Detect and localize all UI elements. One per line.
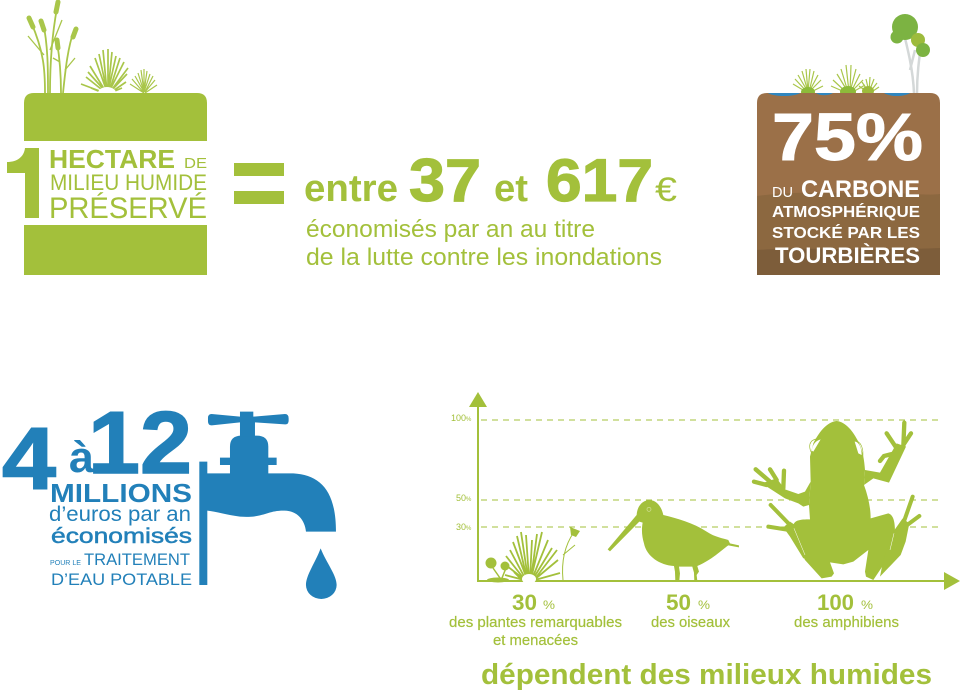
- label: carbon caption: ATMOSPHÉRIQUE: [772, 202, 920, 221]
- stat: 75%: 75%: [772, 100, 923, 175]
- water pools: [768, 93, 910, 96]
- icon: equals sign: [234, 163, 284, 204]
- text: flood savings: 37: [409, 147, 481, 214]
- label: plants 30%: 30: [512, 590, 537, 615]
- label: millions caption: MILLIONS: [50, 478, 192, 508]
- stat: 4 à 12: 4: [2, 409, 56, 508]
- label: plants 30%: [449, 590, 622, 649]
- label: plants 30%: et menacées: [493, 632, 578, 649]
- label: carbon caption: CARBONE: [801, 176, 920, 203]
- icon: tap with drop: [199, 412, 337, 599]
- text: flood savings: [304, 147, 677, 271]
- gridlines and value labels: 50%: [456, 493, 472, 503]
- label: millions caption: POUR LE: [50, 560, 81, 567]
- label: hectare de milieu humide préservé: DE: [184, 155, 207, 172]
- text: flood savings: entre: [304, 168, 398, 210]
- label: birds 50%: [651, 590, 730, 631]
- bottom soil band: [24, 225, 207, 275]
- heading: dépendent des milieux humides: dépendent des milieux humides: [481, 659, 932, 691]
- label: millions caption: économisés: [51, 525, 192, 548]
- label: hectare de milieu humide préservé: PRÉSERVÉ: [49, 192, 207, 225]
- numeral 1: [7, 148, 39, 218]
- label: carbon caption: [772, 176, 920, 268]
- label: birds 50%: %: [698, 598, 710, 612]
- label: millions caption: d’euros par an: [49, 503, 191, 526]
- label: hectare de milieu humide préservé: [49, 144, 207, 225]
- chart: species dependence: [449, 392, 960, 691]
- icon: frog: [754, 421, 919, 580]
- icon: plants: [486, 527, 580, 584]
- icon: birch tree: [890, 14, 930, 93]
- label: amphibians 100%: des amphibiens: [794, 614, 899, 631]
- label: carbon caption: STOCKÉ PAR LES: [772, 223, 920, 242]
- label: carbon caption: DU: [772, 184, 793, 201]
- label: hectare de milieu humide préservé: MILIEU HUMIDE: [50, 170, 207, 195]
- panel: one hectare block: [7, 2, 207, 275]
- text: flood savings: et: [494, 168, 528, 210]
- label: plants 30%: %: [543, 598, 555, 612]
- x axis with arrow: [478, 572, 960, 590]
- label: amphibians 100%: %: [861, 598, 873, 612]
- gridlines and value labels: 30%: [456, 522, 472, 532]
- label: hectare de milieu humide préservé: HECTARE: [49, 144, 175, 174]
- text: flood savings: 617: [546, 147, 653, 214]
- gridlines and value labels: [451, 413, 943, 532]
- icon: peat grasses: [793, 65, 879, 98]
- label: millions caption: [49, 478, 192, 589]
- text: flood savings: de la lutte contre les inondations: [306, 244, 662, 271]
- stat: 4 à 12: 12: [88, 393, 192, 492]
- panel: drinking water savings: [2, 393, 337, 599]
- text: flood savings: économisés par an au titre: [306, 216, 595, 243]
- soil block: [757, 93, 940, 275]
- label: plants 30%: des plantes remarquables: [449, 614, 622, 631]
- top soil band: [24, 93, 207, 141]
- label: carbon caption: TOURBIÈRES: [775, 243, 920, 268]
- stat: 4 à 12: [2, 393, 192, 508]
- stat: 4 à 12: à: [69, 433, 95, 482]
- label: amphibians 100%: 100: [817, 590, 854, 615]
- icon: reeds and grasses: [28, 2, 157, 99]
- label: amphibians 100%: [794, 590, 899, 631]
- panel: peat carbon block: [757, 14, 940, 275]
- icon: snipe bird: [608, 500, 739, 581]
- gridlines and value labels: 100%: [451, 413, 472, 423]
- soil layer middle: [757, 193, 940, 275]
- soil layer bottom: [757, 248, 940, 275]
- y axis with arrow: [469, 392, 487, 582]
- label: birds 50%: 50: [666, 590, 691, 615]
- label: birds 50%: des oiseaux: [651, 614, 730, 631]
- label: millions caption: D’EAU POTABLE: [51, 570, 192, 589]
- text: flood savings: €: [655, 171, 677, 209]
- label: millions caption: TRAITEMENT: [84, 550, 190, 569]
